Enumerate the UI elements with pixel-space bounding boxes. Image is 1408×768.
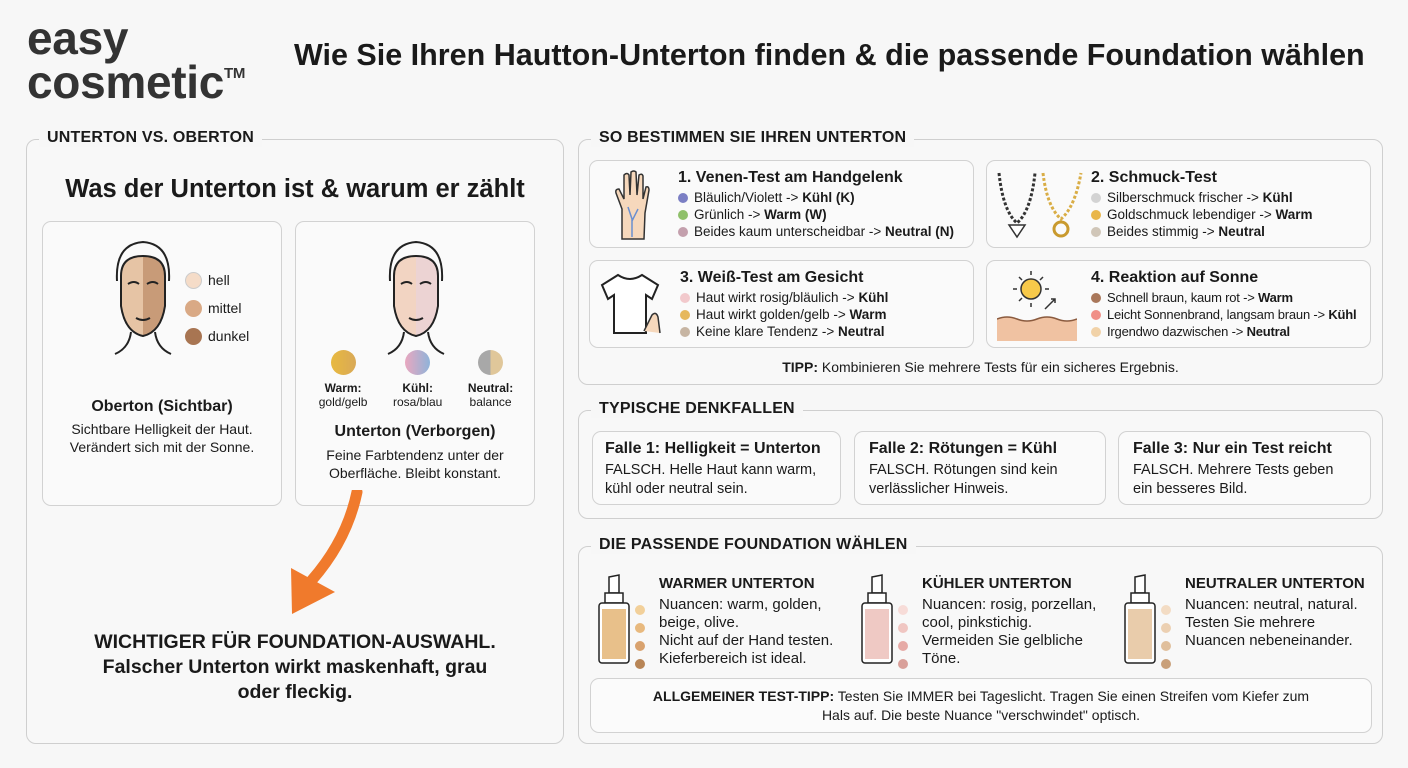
tipp box — [590, 678, 1372, 733]
logo: cosmeticTM — [27, 56, 245, 108]
icon: bottle neutral — [1124, 574, 1156, 664]
card: falle 2 — [854, 431, 1106, 505]
heading: Was der Unterton ist & warum er zählt — [65, 175, 525, 203]
tipp box: Hals auf. Die beste Nuance "verschwindet" optisch. — [822, 707, 1140, 723]
column: warm: WARMER UNTERTON — [659, 575, 815, 592]
card: sonne: Irgendwo dazwischen -> Neutral — [1107, 324, 1290, 339]
icon: face unterton — [388, 241, 444, 355]
card: weiss-test — [589, 260, 974, 348]
icon: face oberton — [114, 241, 172, 355]
column: kuehl: Vermeiden Sie gelbliche — [922, 632, 1083, 649]
column: kuehl: Töne. — [922, 650, 960, 667]
column: kuehl: Nuancen: rosig, porzellan, — [922, 596, 1096, 613]
card: falle 1 — [592, 431, 841, 505]
card: falle 2: verlässlicher Hinweis. — [869, 481, 1008, 497]
icon: necklaces — [998, 172, 1082, 238]
icon: t-shirt — [600, 274, 661, 334]
text unterton — [326, 423, 504, 481]
card: schmuck-test: Goldschmuck lebendiger -> Warm — [1107, 207, 1312, 222]
swatches unterton: Neutral: — [468, 381, 513, 395]
icon: sun & skin — [997, 271, 1077, 341]
card: falle 3 — [1118, 431, 1371, 505]
text oberton: Verändert sich mit der Sonne. — [70, 439, 254, 455]
card: schmuck-test: Silberschmuck frischer -> Kühl — [1107, 190, 1293, 205]
card: venen-test: Bläulich/Violett -> Kühl (K) — [694, 190, 855, 205]
logo — [27, 12, 245, 108]
callout text — [94, 631, 496, 703]
card: sonne: Leicht Sonnenbrand, langsam braun -> Kühl — [1107, 307, 1356, 322]
column: kuehl: KÜHLER UNTERTON — [922, 575, 1072, 592]
text oberton — [70, 398, 254, 455]
card: schmuck-test: 2. Schmuck-Test — [1091, 169, 1217, 186]
swatches unterton: balance — [470, 395, 512, 409]
icon: bottle cool — [861, 574, 893, 664]
card: venen-test — [589, 160, 974, 248]
card: venen-test: Grünlich -> Warm (W) — [694, 207, 827, 222]
callout text: Falscher Unterton wirkt maskenhaft, grau — [103, 656, 487, 678]
icon: bottle warm — [598, 574, 630, 664]
card: weiss-test: 3. Weiß-Test am Gesicht — [680, 269, 863, 286]
tipp: TIPP: Kombinieren Sie mehrere Tests für ein sicheres Ergebnis. — [782, 359, 1179, 375]
column: warm: Nicht auf der Hand testen. — [659, 632, 833, 649]
panel: so bestimmen — [578, 139, 1383, 385]
card: venen-test: 1. Venen-Test am Handgelenk — [678, 169, 903, 186]
text unterton: Oberfläche. Bleibt konstant. — [329, 465, 501, 481]
callout text: WICHTIGER FÜR FOUNDATION-AUSWAHL. — [94, 631, 496, 653]
swatches unterton: Kühl: — [402, 381, 433, 395]
callout text: oder fleckig. — [238, 681, 352, 703]
swatches oberton: mittel — [208, 300, 241, 316]
card: schmuck-test — [986, 160, 1371, 248]
swatches oberton: dunkel — [208, 328, 249, 344]
panel: denkfallen — [578, 410, 1383, 519]
column: warm — [598, 574, 833, 669]
swatches oberton — [185, 272, 249, 345]
card: weiss-test: Haut wirkt rosig/bläulich -> Kühl — [696, 290, 888, 305]
column: neutral: Nuancen: neutral, natural. — [1185, 596, 1358, 613]
swatches oberton: hell — [208, 272, 230, 288]
card: falle 2: Falle 2: Rötungen = Kühl — [869, 440, 1057, 457]
card: weiss-test: Keine klare Tendenz -> Neutral — [696, 324, 884, 339]
swatches unterton: rosa/blau — [393, 395, 442, 409]
legend: SO BESTIMMEN SIE IHREN UNTERTON — [599, 129, 906, 146]
card: unterton — [295, 221, 535, 506]
card: sonne — [986, 260, 1371, 348]
legend: UNTERTON VS. OBERTON — [47, 129, 254, 146]
column: neutral — [1124, 574, 1365, 669]
card: falle 3: Falle 3: Nur ein Test reicht — [1133, 440, 1332, 457]
column: warm: beige, olive. — [659, 614, 739, 631]
column: neutral: Testen Sie mehrere — [1185, 614, 1315, 631]
column: neutral: NEUTRALER UNTERTON — [1185, 575, 1365, 592]
logo: easy — [27, 12, 128, 64]
column: warm: Nuancen: warm, golden, — [659, 596, 822, 613]
text oberton: Oberton (Sichtbar) — [91, 398, 233, 415]
card: falle 3: ein besseres Bild. — [1133, 481, 1247, 497]
column: kuehl — [861, 574, 1096, 669]
panel: foundation — [578, 546, 1383, 744]
column: warm: Kieferbereich ist ideal. — [659, 650, 807, 667]
arrow: orange — [291, 490, 362, 614]
text unterton: Unterton (Verborgen) — [335, 423, 495, 440]
card: sonne: 4. Reaktion auf Sonne — [1091, 269, 1258, 286]
column: kuehl: cool, pinkstichig. — [922, 614, 1032, 631]
text oberton: Sichtbare Helligkeit der Haut. — [71, 421, 253, 437]
legend: TYPISCHE DENKFALLEN — [599, 400, 795, 417]
icon: hand — [615, 170, 650, 240]
card: falle 1: FALSCH. Helle Haut kann warm, — [605, 462, 816, 478]
card: falle 1: kühl oder neutral sein. — [605, 481, 748, 497]
card: sonne: Schnell braun, kaum rot -> Warm — [1107, 290, 1293, 305]
title: Wie Sie Ihren Hautton-Unterton finden & die passende Foundation wählen — [294, 38, 1365, 72]
card: schmuck-test: Beides stimmig -> Neutral — [1107, 224, 1265, 239]
card: falle 1: Falle 1: Helligkeit = Unterton — [605, 440, 821, 457]
swatches unterton: gold/gelb — [319, 395, 367, 409]
tipp box: ALLGEMEINER TEST-TIPP: Testen Sie IMMER bei Tageslicht. Tragen Sie einen Streifen vom Kiefer zum — [653, 688, 1309, 704]
card: falle 3: FALSCH. Mehrere Tests geben — [1133, 462, 1333, 478]
swatches unterton — [319, 350, 513, 409]
card: oberton — [42, 221, 282, 506]
panel: unterton vs oberton — [26, 139, 564, 744]
card: weiss-test: Haut wirkt golden/gelb -> Warm — [696, 307, 886, 322]
card: venen-test: Beides kaum unterscheidbar -> Neutral (N) — [694, 224, 954, 239]
card: falle 2: FALSCH. Rötungen sind kein — [869, 462, 1058, 478]
swatches unterton: Warm: — [325, 381, 362, 395]
legend: DIE PASSENDE FOUNDATION WÄHLEN — [599, 536, 908, 553]
column: neutral: Nuancen nebeneinander. — [1185, 632, 1353, 649]
text unterton: Feine Farbtendenz unter der — [326, 447, 504, 463]
